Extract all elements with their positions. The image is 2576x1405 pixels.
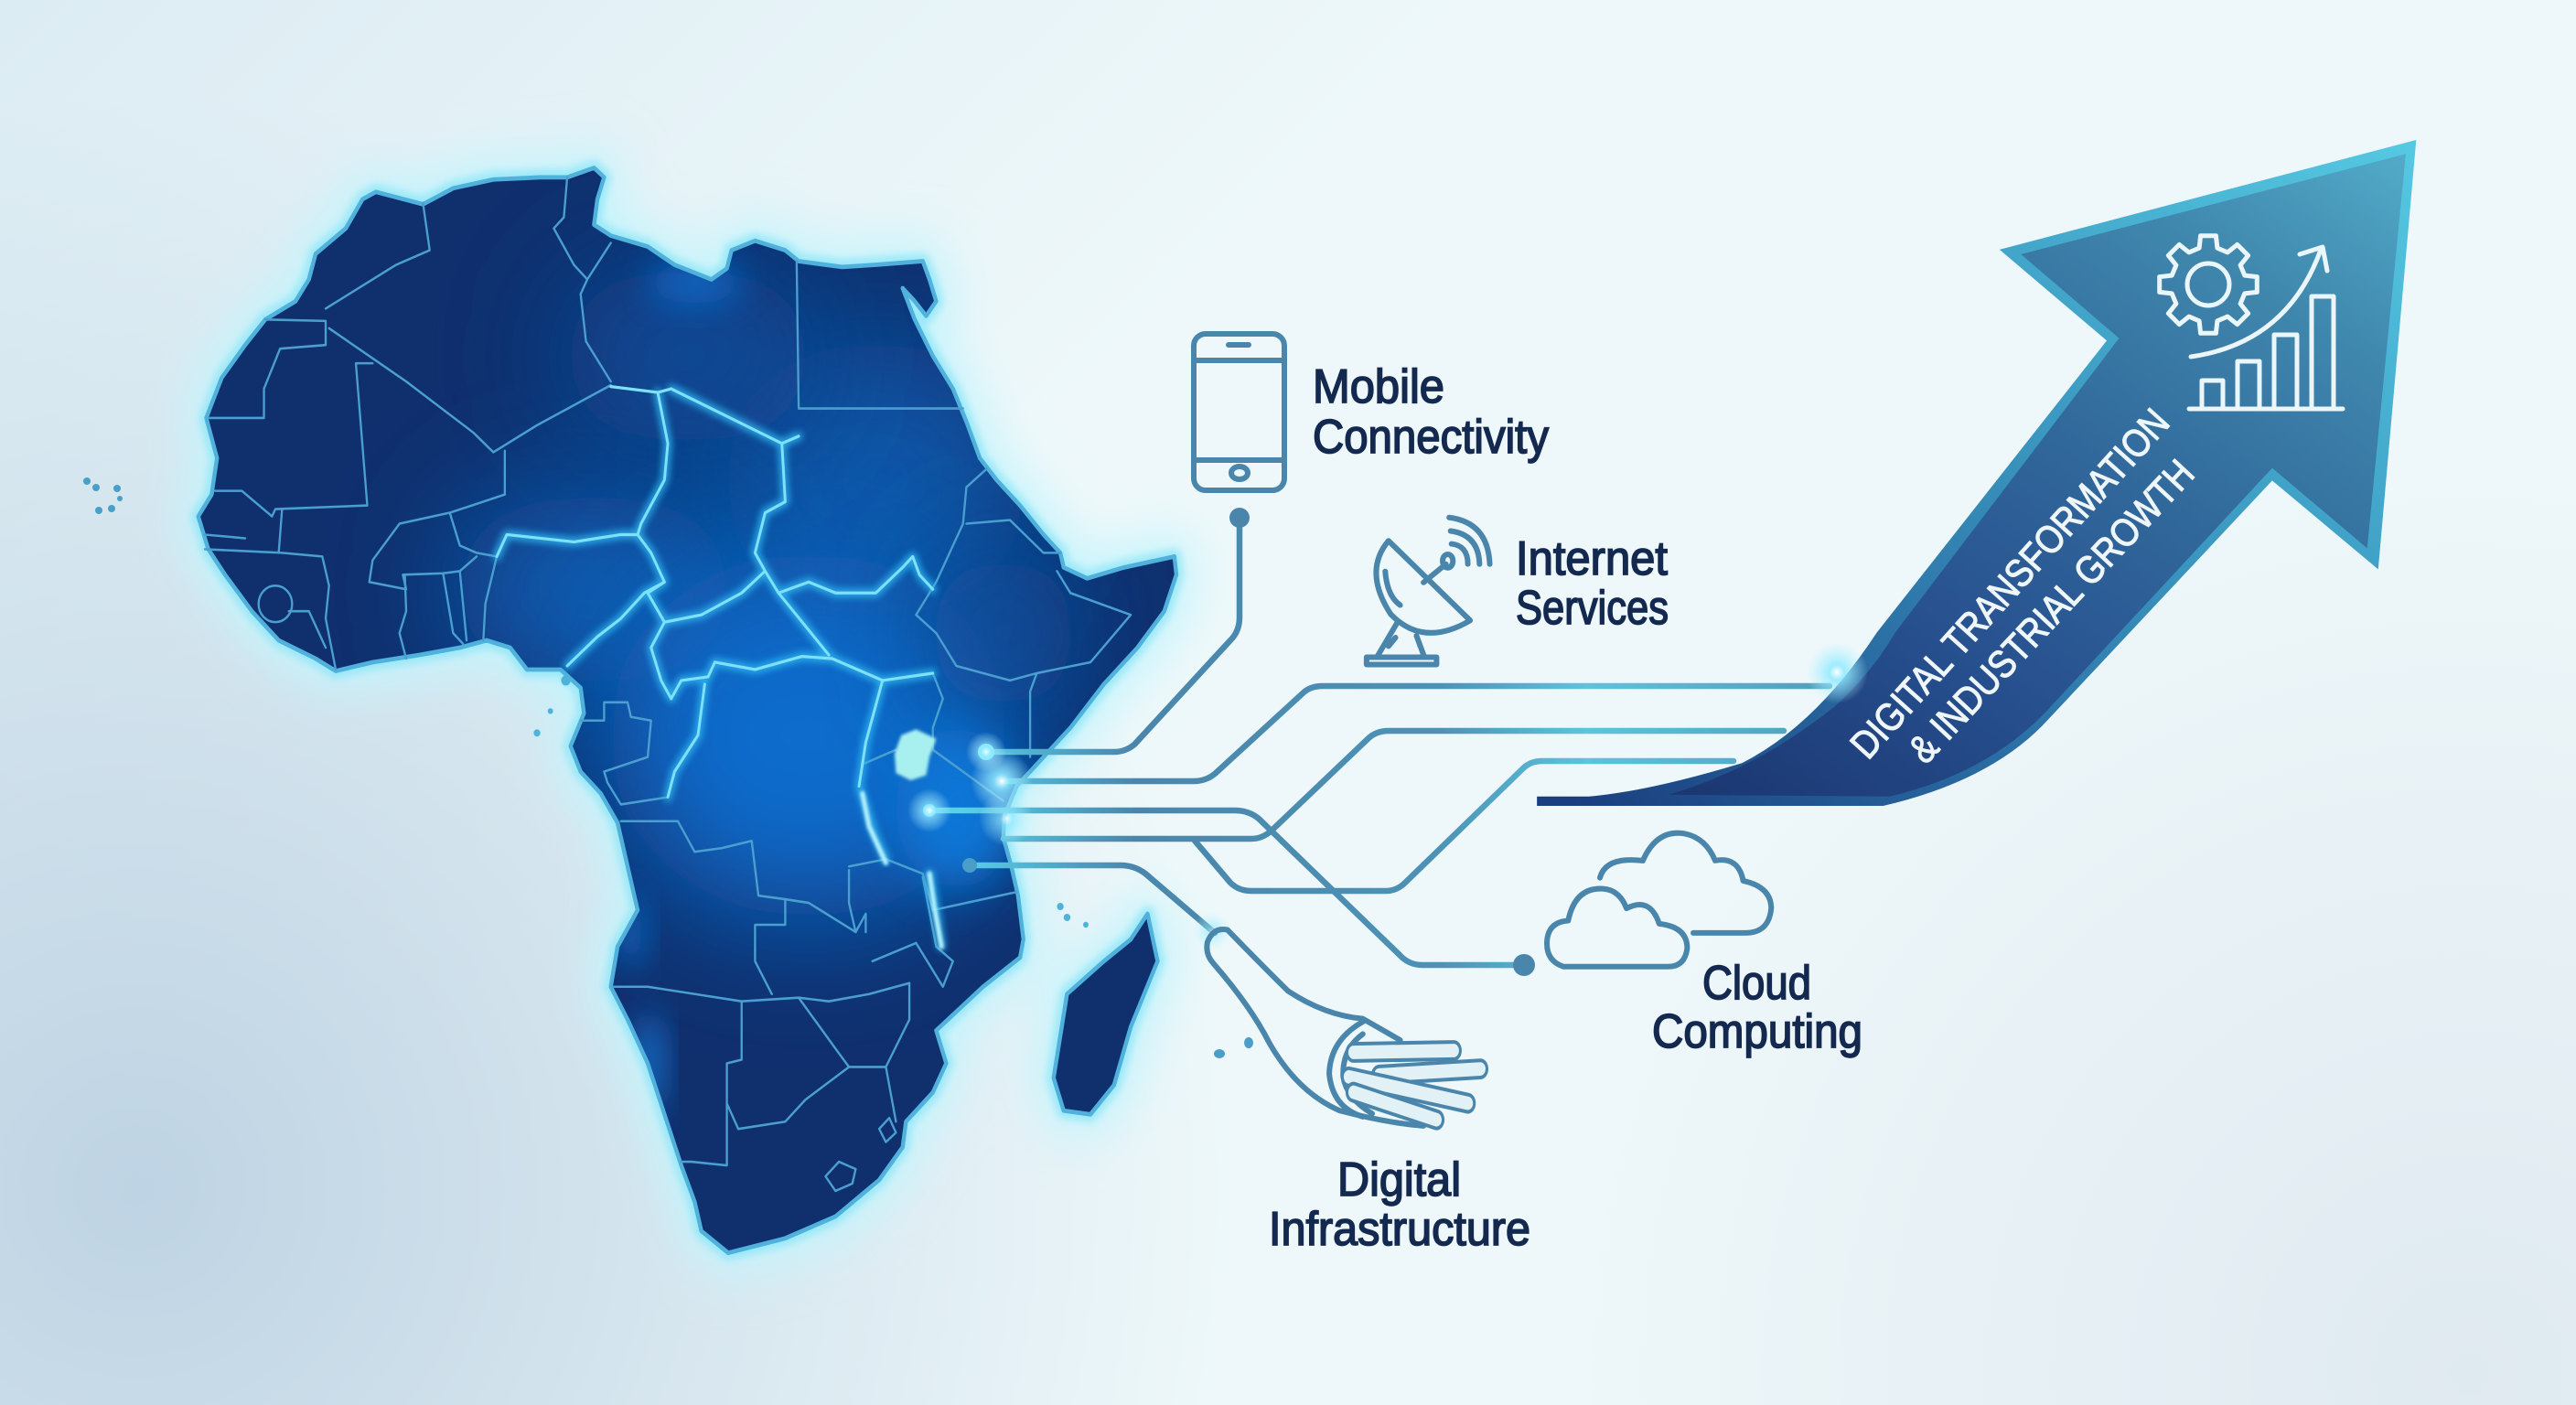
fibre strands <box>1348 1050 1480 1120</box>
arrow junction glow <box>1806 641 1868 703</box>
label: Internet Services: Services <box>1516 582 1669 635</box>
icon: cloud <box>1547 833 1771 967</box>
map outline <box>199 167 1176 1253</box>
arrow body <box>1669 154 2406 797</box>
label: Internet Services: Internet <box>1516 532 1669 585</box>
lake Victoria <box>895 729 936 780</box>
label: Digital Infrastructure: Digital <box>1337 1153 1461 1207</box>
arrow border <box>1537 140 2416 806</box>
arrow text: DIGITAL TRANSFORMATION <box>1842 401 2178 767</box>
arrow: digital transformation growth <box>1537 140 2416 806</box>
dots near cable <box>1214 1037 1253 1058</box>
label: Digital Infrastructure <box>1269 1153 1530 1256</box>
label: Cloud Computing <box>1652 957 1862 1058</box>
coast port glows <box>907 732 1232 951</box>
rift lakes <box>863 793 941 947</box>
cable sheath <box>1207 929 1423 1126</box>
line: cloud computing <box>923 804 1535 976</box>
icon: bar chart with growth curve <box>2189 247 2343 409</box>
islands: Cape Verde <box>83 477 123 514</box>
connector lines <box>923 508 1830 976</box>
line: to arrow lower <box>1195 761 1733 891</box>
icon: mobile phone <box>1194 334 1284 490</box>
map glow <box>199 167 1176 1253</box>
map: Africa <box>165 137 1238 1304</box>
map inner glow <box>199 167 1176 1253</box>
label: Mobile Connectivity: Connectivity <box>1313 411 1549 464</box>
line: mobile connectivity <box>978 508 1250 760</box>
icon: satellite dish <box>1367 518 1490 665</box>
label: Digital Infrastructure: Infrastructure <box>1269 1203 1530 1256</box>
line: to arrow top <box>1004 686 1830 781</box>
label: Mobile Connectivity <box>1313 360 1549 464</box>
glowing borders <box>497 387 933 797</box>
arrow text: & INDUSTRIAL GROWTH <box>1900 452 2203 772</box>
icon: fibre optic cable <box>1207 929 1480 1126</box>
line: to arrow middle <box>1004 731 1784 839</box>
label: Cloud Computing: Cloud <box>1702 957 1811 1010</box>
map fill <box>200 170 1175 1251</box>
label: Internet Services <box>1516 532 1669 635</box>
line: digital infrastructure <box>962 858 1215 933</box>
icon: gear <box>2160 236 2257 333</box>
glowing borders halo <box>497 389 941 947</box>
islands near map <box>533 675 1089 928</box>
label: Cloud Computing: Computing <box>1652 1005 1862 1058</box>
label: Mobile Connectivity: Mobile <box>1313 360 1444 413</box>
country borders <box>205 177 1131 1191</box>
